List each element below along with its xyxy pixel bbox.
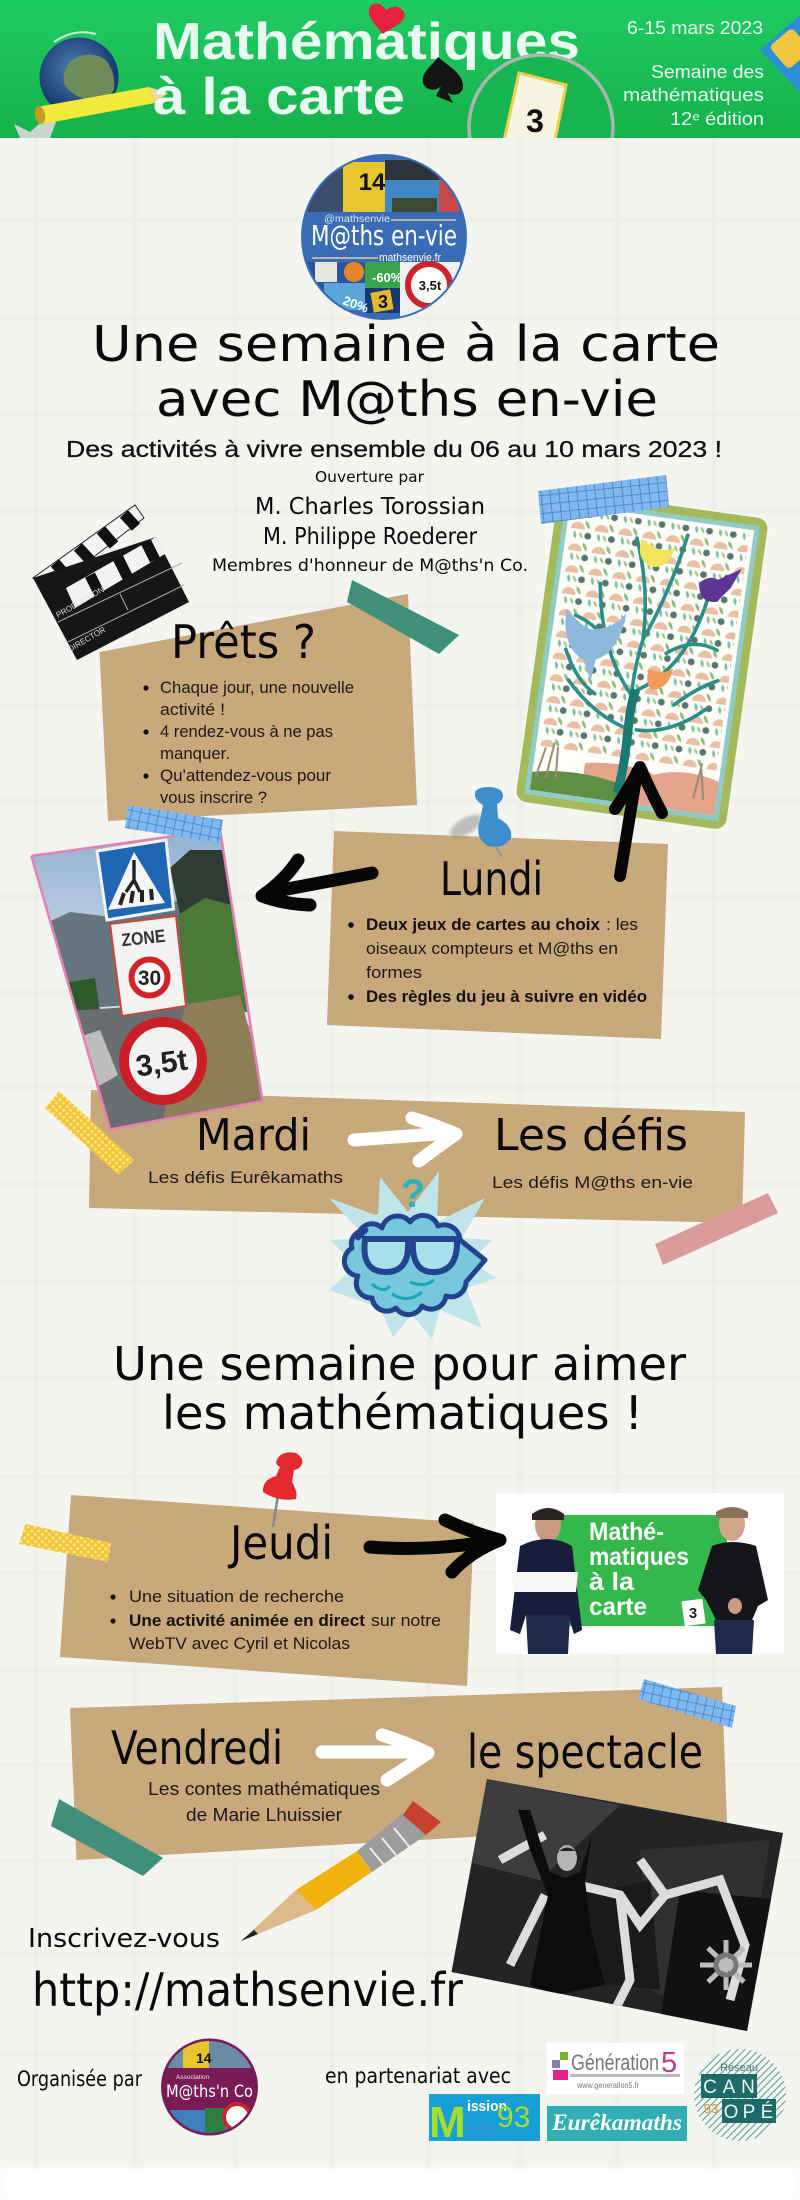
icon: zone 30 sign: 30	[138, 967, 161, 990]
text: website url: http://mathsenvie.fr	[32, 1963, 463, 2017]
icon: crosswalk sign	[97, 840, 174, 920]
panel: Lundi	[327, 831, 668, 1039]
heading: Vendredi: Vendredi	[111, 1721, 283, 1775]
logo: Mission Math 93: M	[429, 2098, 466, 2147]
list: Jeudi bullets: Une activité animée en direct	[129, 1611, 365, 1630]
logo: Eurêkamaths	[547, 2106, 687, 2141]
heading: Prêts: Prêts ?	[171, 615, 316, 669]
icon: red push pin	[263, 1452, 302, 1527]
logo: Réseau Canopé: P	[743, 2102, 755, 2123]
logo: Génération 5: Génération	[571, 2050, 659, 2075]
main heading: Une semaine à la carte	[92, 316, 720, 373]
list: Lundi bullets: formes	[366, 963, 422, 982]
caption: Les défis Maths en-vie: Les défis M@ths en-vie	[492, 1173, 693, 1192]
header dates	[623, 18, 764, 129]
caption: Les contes mathématiques: de Marie Lhuissier	[186, 1805, 342, 1825]
heading: le spectacle: le spectacle	[467, 1725, 703, 1779]
icon: snowflake	[700, 1940, 752, 1990]
logo: Mission Math 93: ission	[467, 2098, 507, 2115]
panel: Jeudi	[60, 1495, 474, 1686]
image: dancer photo	[452, 1779, 783, 2035]
logo: Réseau Canopé: É	[761, 2102, 773, 2123]
main heading: avec M@ths en-vie	[156, 371, 658, 428]
list: Prêts bullets: Chaque jour, une nouvelle	[160, 678, 354, 697]
logo: Réseau Canopé: N	[741, 2077, 755, 2098]
heading: Les défis: Les défis	[494, 1110, 688, 1161]
person: right presenter	[698, 1507, 768, 1654]
heading: Une semaine pour aimer	[113, 1337, 686, 1440]
icon: film clapper: DIRECTOR	[66, 625, 107, 654]
header banner	[0, 0, 800, 138]
logo: Réseau Canopé: A	[723, 2077, 736, 2098]
image: road signs photo	[30, 831, 264, 1130]
logo: Maths en-vie: @mathsenvie	[324, 213, 390, 225]
header dates: mathématiques	[623, 85, 764, 105]
icon: sim card	[760, 15, 800, 92]
logo: Maths en-vie: 20%	[341, 293, 371, 316]
icon: film clapper	[33, 505, 189, 660]
arrow: Jeudi to video	[370, 1520, 500, 1572]
list: Jeudi bullets: Une situation de recherche	[129, 1587, 344, 1606]
image: video screenshot	[496, 1493, 784, 1654]
heading: Mardi: Mardi	[196, 1110, 311, 1161]
list: Prêts bullets: manquer.	[160, 744, 230, 763]
arrow: Vendredi to le spectacle	[322, 1735, 428, 1780]
icon: blue push pin	[446, 787, 511, 857]
logo: Mission Math 93: ath	[465, 2117, 496, 2142]
heading: Lundi: Lundi	[440, 852, 543, 906]
video title	[589, 1518, 689, 1621]
heading: Jeudi: Jeudi	[227, 1516, 333, 1570]
opening credits: Membres d'honneur de M@ths'n Co.	[212, 556, 528, 576]
header title	[154, 20, 578, 114]
video title: Mathé-	[589, 1518, 664, 1546]
logo: Maths'n Co: M@ths'n Co	[166, 2082, 253, 2102]
panel: Vendredi	[70, 1687, 727, 1860]
icon: globe on stand	[14, 32, 118, 138]
list: Lundi bullets: oiseaux compteurs et M@ths en	[366, 939, 618, 958]
logo: Eurêkamaths: Eurêkamaths	[551, 2110, 682, 2135]
icon: yellow tape on Jeudi	[19, 1524, 111, 1562]
icon: 3,5t sign	[124, 1022, 202, 1100]
icon: purple bird	[697, 563, 742, 605]
logo: Génération 5: www.generation5.fr	[576, 2080, 639, 2090]
opening credits: M. Philippe Roederer	[263, 524, 477, 550]
logo: Réseau Canopé: O	[724, 2102, 738, 2123]
logo: Maths en-vie: 3	[378, 292, 388, 312]
logo: Maths'n Co: Association	[176, 2074, 210, 2081]
logo: Réseau Canopé: 93	[704, 2101, 718, 2116]
text: Organisée par: Organisée par	[17, 2067, 142, 2091]
icon: zone 30 sign	[110, 916, 186, 1016]
logo: Maths en-vie: M@ths en-vie	[311, 219, 457, 252]
list: Lundi bullets: Des règles du jeu à suivre en vidéo	[366, 987, 647, 1006]
logo: Génération 5	[547, 2043, 684, 2094]
caption: Les contes mathématiques	[148, 1779, 380, 1825]
list: Jeudi bullets: WebTV avec Cyril et Nicolas	[129, 1634, 350, 1653]
icon: teal tape on Vendredi	[51, 1799, 163, 1876]
image: tree card	[514, 489, 770, 831]
logo: Génération 5: 5	[661, 2047, 677, 2079]
caption: Les contes mathématiques: Les contes mathématiques	[148, 1779, 380, 1799]
logo: Réseau Canopé	[694, 2049, 786, 2141]
text: en partenariat avec: en partenariat avec	[325, 2064, 511, 2088]
caption: Les défis Eurêkamaths: Les défis Eurêkamaths	[148, 1168, 343, 1187]
icon: yellow pencil	[33, 87, 168, 125]
icon: pink tape	[655, 1193, 778, 1265]
logo: Réseau Canopé: Réseau	[720, 2062, 758, 2074]
header dates: 12ᵉ édition	[670, 109, 764, 129]
icon: blue tape on Vendredi	[638, 1679, 736, 1728]
subtitle: Des activités à vivre ensemble du 06 au 10 mars 2023 !	[66, 436, 722, 462]
icon: brain with glasses	[329, 1171, 497, 1339]
header title: Mathématiques	[153, 13, 580, 71]
arrow: up to tree card	[615, 767, 662, 876]
list: Prêts bullets: 4 rendez-vous à ne pas	[160, 722, 333, 741]
list: Lundi bullets	[348, 915, 647, 1006]
icon: zone 30 sign: ZONE	[120, 926, 166, 950]
icon: yellow tape on road photo	[45, 1091, 134, 1175]
header title: à la carte	[153, 68, 405, 126]
logo: Maths en-vie: 14	[359, 169, 386, 196]
heading: Une semaine pour aimer: Une semaine pour aimer	[113, 1337, 686, 1391]
icon: question mark: ?	[401, 1172, 425, 1216]
icon: film clapper: PRODUCTION	[54, 585, 106, 620]
icon: 3,5t sign: 3,5t	[134, 1044, 190, 1084]
person: dancer	[518, 1810, 605, 1995]
header dates: 6-15 mars 2023	[627, 18, 763, 38]
opening credits	[212, 468, 528, 576]
list: Jeudi bullets	[110, 1587, 441, 1653]
text: Inscrivez-vous: Inscrivez-vous	[28, 1924, 220, 1954]
icon: small card: 3	[689, 1605, 697, 1622]
list: Prêts bullets: vous inscrire ?	[160, 788, 267, 807]
person: left presenter	[510, 1508, 582, 1654]
logo: Maths en-vie: -60%	[372, 270, 403, 285]
icon: magnifier with card	[467, 53, 615, 138]
icon: blue tape on tree card	[538, 475, 669, 524]
icon: magnifier with card: 3	[526, 103, 544, 139]
arrow: left to road photo	[262, 860, 372, 905]
logo: Réseau Canopé: C	[703, 2077, 717, 2098]
video title: à la	[589, 1568, 635, 1596]
logo: Mission Math 93: 93	[497, 2101, 530, 2134]
icon: blue bird	[557, 605, 626, 685]
icon: small card	[681, 1599, 706, 1626]
list: Jeudi bullets: sur notre	[371, 1611, 441, 1630]
logo: Maths'n Co: 14	[196, 2050, 212, 2066]
video title: matiques	[589, 1543, 689, 1571]
list: Prêts bullets: Qu'attendez-vous pour	[160, 766, 331, 785]
logo: Maths en-vie: 3,5t	[419, 278, 442, 293]
icon: heart	[368, 4, 405, 34]
list: Prêts bullets: activité !	[160, 700, 225, 719]
panel: Prêts	[100, 594, 417, 821]
header dates: Semaine des	[651, 62, 764, 82]
arrow: Mardi to Les défis	[354, 1118, 456, 1161]
video title: carte	[589, 1593, 647, 1621]
icon: orange bird	[646, 665, 673, 692]
opening credits: Ouverture par	[315, 468, 425, 486]
logo: Maths'n Co	[160, 2038, 260, 2140]
logo: Maths en-vie	[300, 154, 467, 320]
list: Lundi bullets: : les	[606, 915, 638, 934]
opening credits: M. Charles Torossian	[255, 494, 485, 520]
logo: Maths en-vie: mathsenvie.fr	[379, 252, 441, 264]
heading: Une semaine pour aimer: les mathématiques !	[162, 1386, 643, 1440]
icon: teal tape	[347, 580, 459, 654]
list: Lundi bullets: Deux jeux de cartes au choix	[366, 915, 601, 934]
logo: Mission Math 93	[429, 2094, 540, 2147]
main heading	[92, 316, 720, 428]
icon: blue tape on road photo	[125, 805, 223, 843]
icon: pencil	[241, 1801, 441, 1941]
icon: yellow bird	[637, 539, 676, 569]
panel: Mardi	[89, 1090, 745, 1223]
icon: spade	[423, 57, 463, 103]
list: Prêts bullets	[143, 678, 354, 807]
